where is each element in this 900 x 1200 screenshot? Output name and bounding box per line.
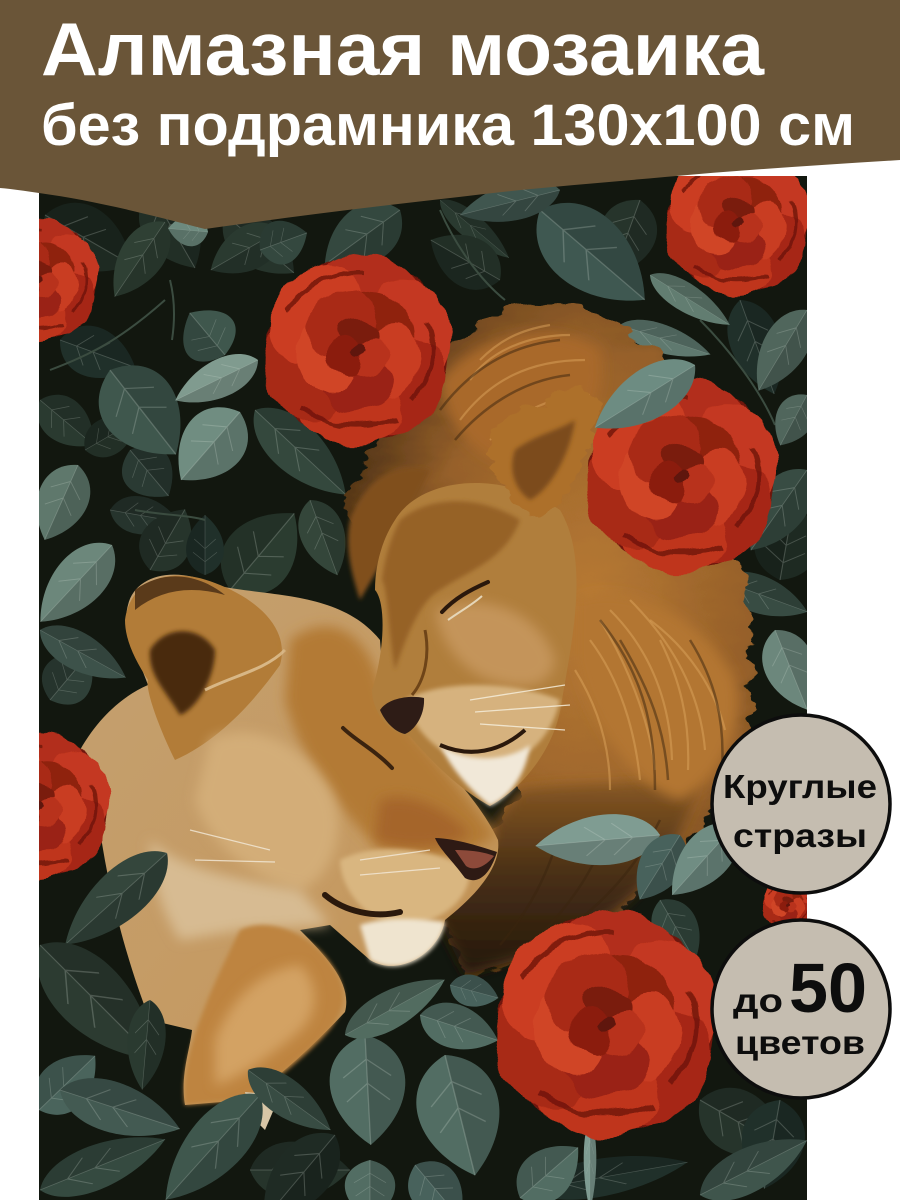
title: Алмазная мозаика: [41, 7, 765, 91]
leaves: bottom: [15, 809, 817, 1200]
badge: up to 50 colours: цветов: [735, 1024, 865, 1061]
rose: bottom centre: [496, 910, 714, 1140]
male lion mane: [345, 305, 752, 975]
rose: top right: [666, 176, 807, 298]
rose: by the mane: [587, 378, 779, 576]
lioness face shading: [150, 626, 497, 966]
badge: round rhinestones: стразы: [733, 817, 867, 854]
badge: up to 50 colours: 50: [789, 949, 867, 1027]
rose: lower left: [39, 732, 112, 880]
photo: lions and roses: [39, 176, 807, 1200]
background foliage: [26, 176, 825, 1200]
male lion head: [372, 483, 577, 806]
rose: top centre: [264, 254, 453, 448]
leaves: upper and side: [22, 172, 831, 719]
leaf over rose: [594, 359, 696, 428]
badge: round rhinestones: [712, 715, 890, 893]
badge: round rhinestones: Круглые: [723, 768, 877, 805]
rose: top left: [39, 218, 100, 343]
lioness body and head: [80, 575, 498, 1130]
lioness ear: [125, 575, 285, 760]
header banner: [0, 0, 900, 229]
male lion ear: [489, 391, 598, 520]
badge: up to 50 colours: до: [733, 982, 783, 1019]
badge: up to 50 colours: [712, 920, 890, 1098]
subtitle: без подрамника 130х100 см: [41, 93, 855, 158]
rose: small right: [762, 888, 807, 924]
lioness paw: [184, 925, 343, 1130]
